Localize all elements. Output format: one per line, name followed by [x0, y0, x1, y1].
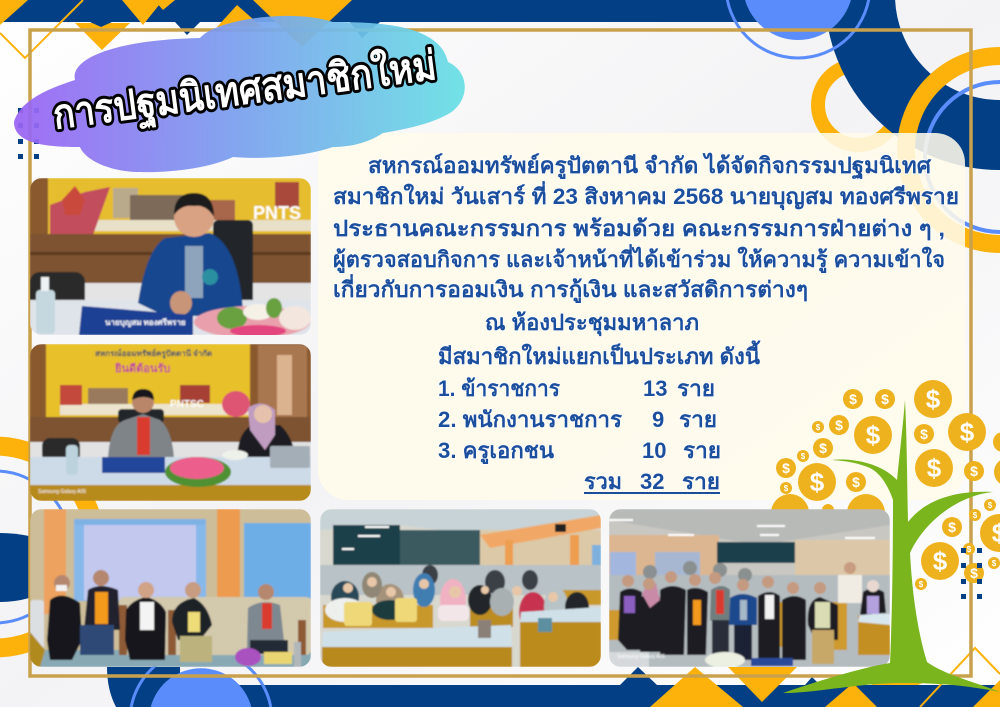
body text: มีสมาชิกใหม่แยกเป็นประเภท ดังนี้	[438, 340, 761, 369]
money tree coins: $	[816, 423, 821, 432]
money tree coins: $	[948, 519, 956, 535]
money tree coins: $	[970, 463, 978, 479]
body text: 10	[642, 438, 666, 463]
body text: รวม	[584, 469, 622, 494]
body text: เกี่ยวกับการออมเงิน การกู้เงิน และสวัสดิการต่างๆ	[333, 273, 808, 304]
gold frame bottom overlay	[29, 674, 899, 678]
title blob	[14, 16, 465, 172]
money tree coins	[771, 380, 1000, 590]
money tree coins: $	[973, 511, 978, 520]
money tree coins: $	[784, 484, 789, 493]
body text: 13	[643, 376, 667, 401]
body text: สมาชิกใหม่ วันเสาร์ ที่ 23 สิงหาคม 2568 นายบุญสม ทองศรีพราย	[333, 180, 959, 211]
money tree coins: $	[881, 391, 889, 407]
money tree coins: $	[849, 391, 857, 407]
photo 4: seated audience	[320, 509, 601, 667]
bottom decorative band	[107, 648, 1000, 707]
body text	[333, 152, 959, 494]
body text: สหกรณ์ออมทรัพย์ครูปัตตานี จำกัด ได้จัดกิจกรรมปฐมนิเทศ	[368, 152, 932, 180]
top decorative band	[0, 0, 890, 58]
photo 1: chairman: PNTS	[253, 203, 301, 223]
dot grid left	[18, 108, 39, 159]
photo 5: group portrait: Samsung Galaxy A05	[617, 654, 665, 660]
money tree trunk	[783, 400, 1000, 693]
money tree coins: $	[852, 474, 860, 490]
body text: 32	[640, 469, 664, 494]
money tree coins: $	[782, 460, 790, 476]
body text: ราย	[677, 376, 715, 401]
title text: การปฐมนิเทศสมาชิกใหม่	[50, 41, 439, 142]
money tree coins: $	[835, 417, 843, 433]
body text: 1. ข้าราชการ	[438, 376, 560, 401]
body text: ราย	[683, 438, 721, 463]
body text: ประธานคณะกรรมการ พร้อมด้วย คณะกรรมการฝ่ายต่าง ๆ ,	[333, 216, 945, 241]
body text: 3. ครูเอกชน	[438, 438, 554, 465]
body text: 9	[652, 407, 664, 432]
body text: ราย	[682, 469, 720, 494]
photo 2: officers at table	[30, 344, 311, 501]
money tree coins: $	[970, 565, 978, 581]
photo 2: officers at table: PNTSC	[170, 399, 204, 410]
money tree coins: $	[992, 559, 997, 568]
money tree coins: $	[988, 501, 993, 510]
top right circles	[726, 0, 1000, 244]
money tree coins: $	[801, 452, 806, 461]
money tree coins: $	[960, 417, 975, 447]
photo 2: officers at table: สหกรณ์ออมทรัพย์ครูปัตตานี จำกัด	[95, 348, 212, 359]
money tree coins: $	[967, 545, 972, 554]
body text: 2. พนักงานราชการ	[438, 407, 622, 432]
money tree coins: $	[920, 426, 928, 442]
body text: ณ ห้องประชุมมหาลาภ	[485, 310, 699, 337]
money tree coins: $	[926, 384, 941, 414]
photo 1: chairman: นายบุญสม ทองศรีพราย	[105, 317, 186, 328]
money tree coins: $	[819, 440, 827, 456]
photo 2: officers at table: ยินดีต้อนรับ	[114, 360, 170, 376]
photo 3: sofa group	[30, 509, 311, 667]
left side circles	[0, 446, 96, 648]
photo 1: chairman	[30, 178, 311, 338]
body text: ผู้ตรวจสอบกิจการ และเจ้าหน้าที่ได้เข้าร่วม ให้ความรู้ ความเข้าใจ	[333, 243, 945, 274]
photo 2: officers at table: Samsung Galaxy A05	[38, 489, 86, 495]
money tree coins: $	[919, 580, 924, 589]
cream text panel	[318, 133, 965, 500]
photo 5: group portrait	[609, 509, 890, 668]
body text: ราย	[679, 407, 717, 432]
money tree coins: $	[810, 467, 825, 497]
money tree coins: $	[933, 546, 948, 576]
money tree coins: $	[866, 420, 881, 450]
money tree coins: $	[927, 453, 942, 483]
dot grid right	[961, 548, 982, 599]
